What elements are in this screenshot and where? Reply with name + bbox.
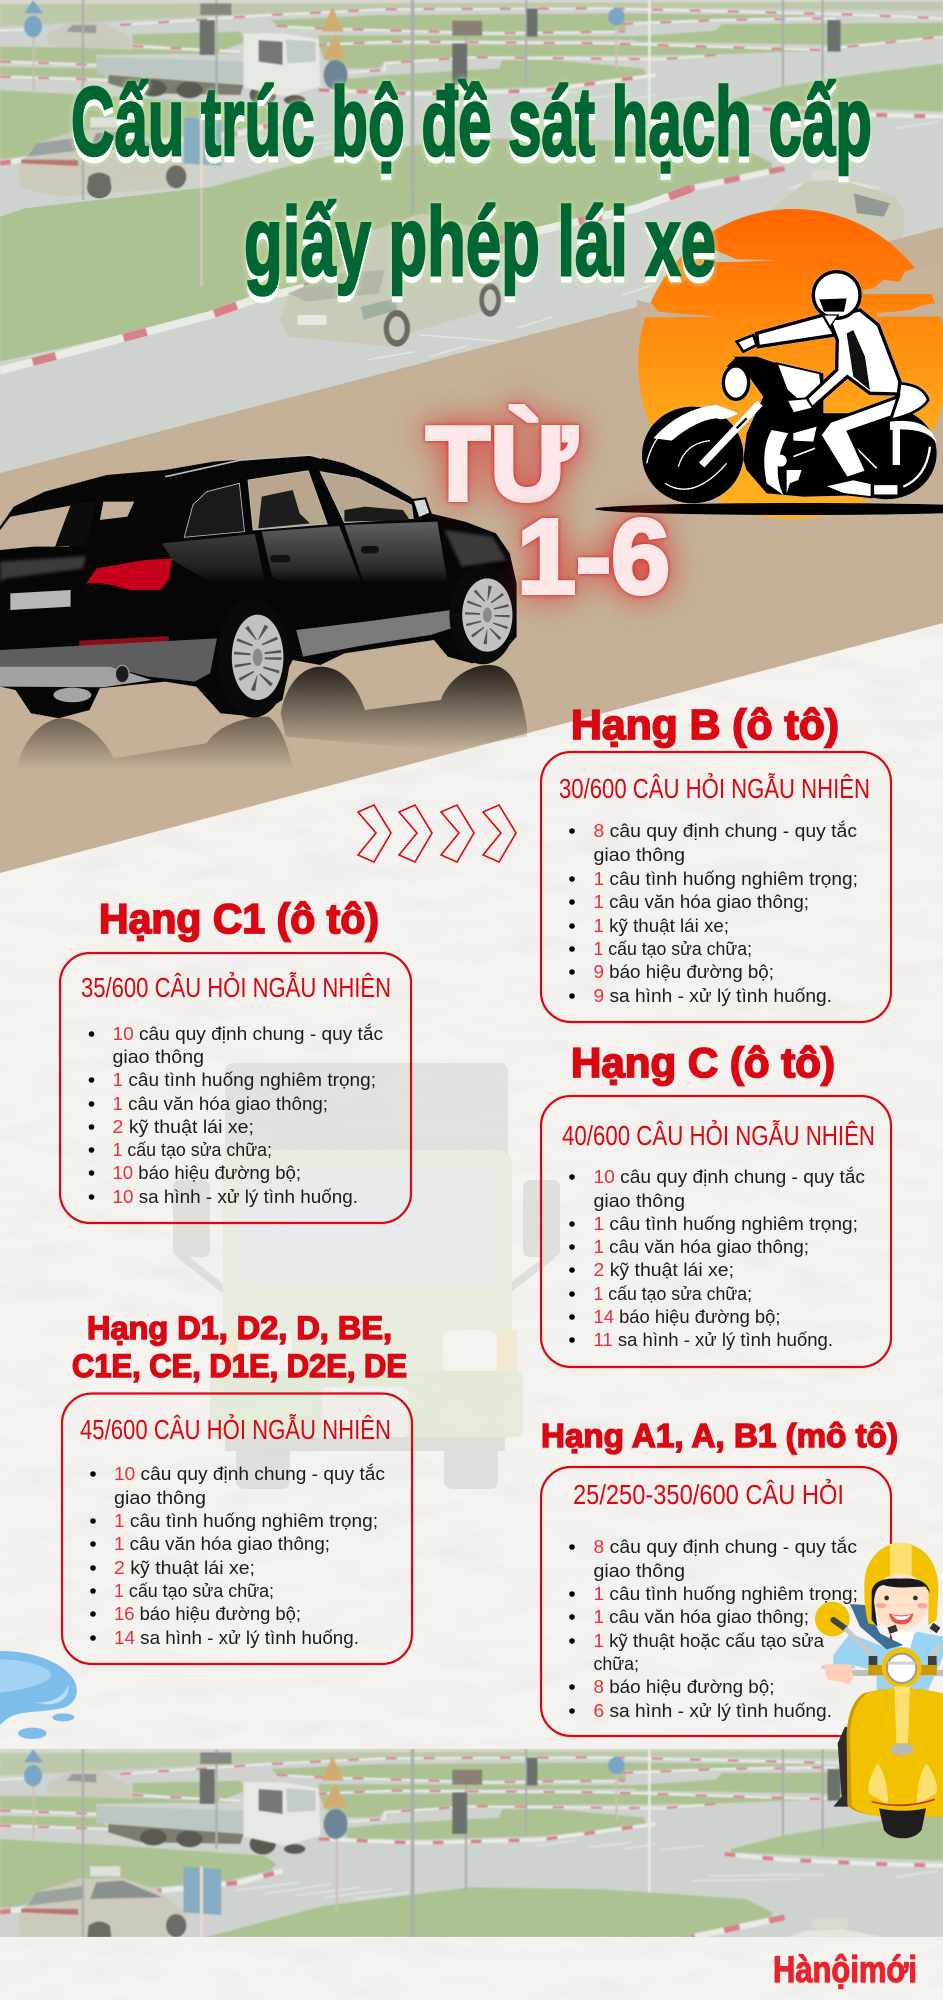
bullet list: 1 kỹ thuật hoặc cấu tạo sửa (594, 1630, 825, 1651)
bullet list: 10 câu quy định chung - quy tắc (112, 1023, 383, 1044)
bullet list: 1 cấu tạo sửa chữa; (594, 1283, 752, 1304)
bullet list: 1 cấu tạo sửa chữa; (112, 1139, 272, 1160)
bullet list: 1 câu văn hóa giao thông; (112, 1093, 328, 1114)
bullet list: 8 báo hiệu đường bộ; (594, 1676, 774, 1697)
icon: motorcycle and rider (642, 272, 937, 503)
heading: 1-6: 1-6 (517, 498, 670, 616)
bullet list: giao thông (112, 1046, 204, 1067)
bullet list (569, 1166, 865, 1350)
bullet list: giao thông (114, 1487, 206, 1508)
icon: girl riding yellow scooter (815, 1543, 943, 1838)
panel box (541, 752, 891, 1022)
shadow under motorcycle (595, 503, 943, 515)
panel title (72, 1310, 407, 1384)
logo: Hànộimới: Hànộimới (773, 1949, 917, 1990)
bullet list: giao thông (594, 1560, 685, 1581)
bullet list: giao thông (594, 1190, 685, 1211)
panel box (541, 1467, 891, 1736)
bullet list: 1 câu văn hóa giao thông; (594, 1606, 809, 1627)
panel title: Hạng D1, D2, D, BE, (87, 1310, 392, 1346)
bullet list: chữa; (594, 1653, 639, 1674)
panel heading: 35/600 CÂU HỎI NGẪU NHIÊN (81, 971, 391, 1003)
bullet list: 1 câu văn hóa giao thông; (594, 891, 809, 912)
panel heading: 30/600 CÂU HỎI NGẪU NHIÊN (559, 772, 870, 804)
panel: Hạng C (541, 1039, 891, 1367)
bullet list: 10 báo hiệu đường bộ; (112, 1162, 301, 1183)
panel box (62, 1394, 412, 1664)
bullet list: 1 câu tình huống nghiêm trọng; (594, 868, 858, 889)
bullet list (89, 1023, 383, 1207)
panel box (541, 1096, 891, 1367)
bullet list: 8 câu quy định chung - quy tắc (594, 820, 857, 841)
bullet list: 2 kỹ thuật lái xe; (594, 1259, 734, 1280)
bullet list: 1 câu tình huống nghiêm trọng; (114, 1510, 378, 1531)
bullet list: 1 câu văn hóa giao thông; (594, 1236, 809, 1257)
panel title: Hạng C1 (ô tô) (99, 895, 379, 942)
background: kraft paper diagonal band (0, 220, 943, 880)
heading: TỪ: TỪ (426, 405, 577, 523)
bullet list: 1 kỹ thuật lái xe; (594, 915, 729, 936)
panel: Hạng B (541, 701, 891, 1022)
bullet list: 1 câu tình huống nghiêm trọng; (594, 1583, 858, 1604)
bullet list: 1 câu văn hóa giao thông; (114, 1533, 330, 1554)
icon: water puddle (0, 1651, 77, 1739)
bullet list: 1 câu tình huống nghiêm trọng; (112, 1069, 376, 1090)
panel: Hạng C1 (60, 895, 411, 1223)
bullet list: 1 cấu tạo sửa chữa; (594, 938, 752, 959)
panel heading: 25/250-350/600 CÂU HỎI (573, 1478, 844, 1510)
bullet list: 9 sa hình - xử lý tình huống. (594, 985, 832, 1006)
panel box (60, 953, 411, 1223)
background: test-yard photo, bottom band (0, 1749, 943, 1937)
bullet list: 14 báo hiệu đường bộ; (594, 1306, 780, 1327)
bullet list: 16 báo hiệu đường bộ; (114, 1603, 301, 1624)
icon: black SUV (0, 455, 527, 770)
bullet list (90, 1463, 385, 1648)
panel title: C1E, CE, D1E, D2E, DE (72, 1348, 407, 1384)
bullet list: 2 kỹ thuật lái xe; (112, 1116, 254, 1137)
bullet list (569, 1536, 858, 1721)
bullet list: giao thông (594, 844, 685, 865)
bullet list: 10 câu quy định chung - quy tắc (114, 1463, 385, 1484)
bullet list: 1 cấu tạo sửa chữa; (114, 1580, 274, 1601)
title (71, 67, 872, 296)
background: test-yard photo, top band (0, 0, 943, 490)
background: faded truck watermark (173, 1063, 560, 1489)
arrows: four chevrons (358, 805, 516, 862)
panel title: Hạng A1, A, B1 (mô tô) (541, 1417, 898, 1454)
bullet list: 2 kỹ thuật lái xe; (114, 1557, 255, 1578)
bullet list: 6 sa hình - xử lý tình huống. (594, 1700, 832, 1721)
bullet list: 10 câu quy định chung - quy tắc (594, 1166, 865, 1187)
bullet list: 9 báo hiệu đường bộ; (594, 961, 774, 982)
bullet list (569, 820, 858, 1006)
bullet list: 11 sa hình - xử lý tình huống. (594, 1329, 833, 1350)
icon: orange sun (637, 209, 943, 519)
panel: Hạng A1, A, B1 (541, 1417, 898, 1736)
panel title: Hạng C (ô tô) (571, 1039, 835, 1086)
bullet list: 1 câu tình huống nghiêm trọng; (594, 1213, 858, 1234)
panel heading: 45/600 CÂU HỎI NGẪU NHIÊN (80, 1413, 391, 1445)
reflection of the SUV on the ground (17, 665, 527, 770)
panel: Hạng D1, D2, D, BE, C1E, CE, D1E, D2E, DE (62, 1310, 412, 1664)
bullet list: 8 câu quy định chung - quy tắc (594, 1536, 857, 1557)
panel title: Hạng B (ô tô) (571, 701, 839, 748)
bullet list: 14 sa hình - xử lý tình huống. (114, 1627, 359, 1648)
bullet list: 10 sa hình - xử lý tình huống. (112, 1186, 358, 1207)
